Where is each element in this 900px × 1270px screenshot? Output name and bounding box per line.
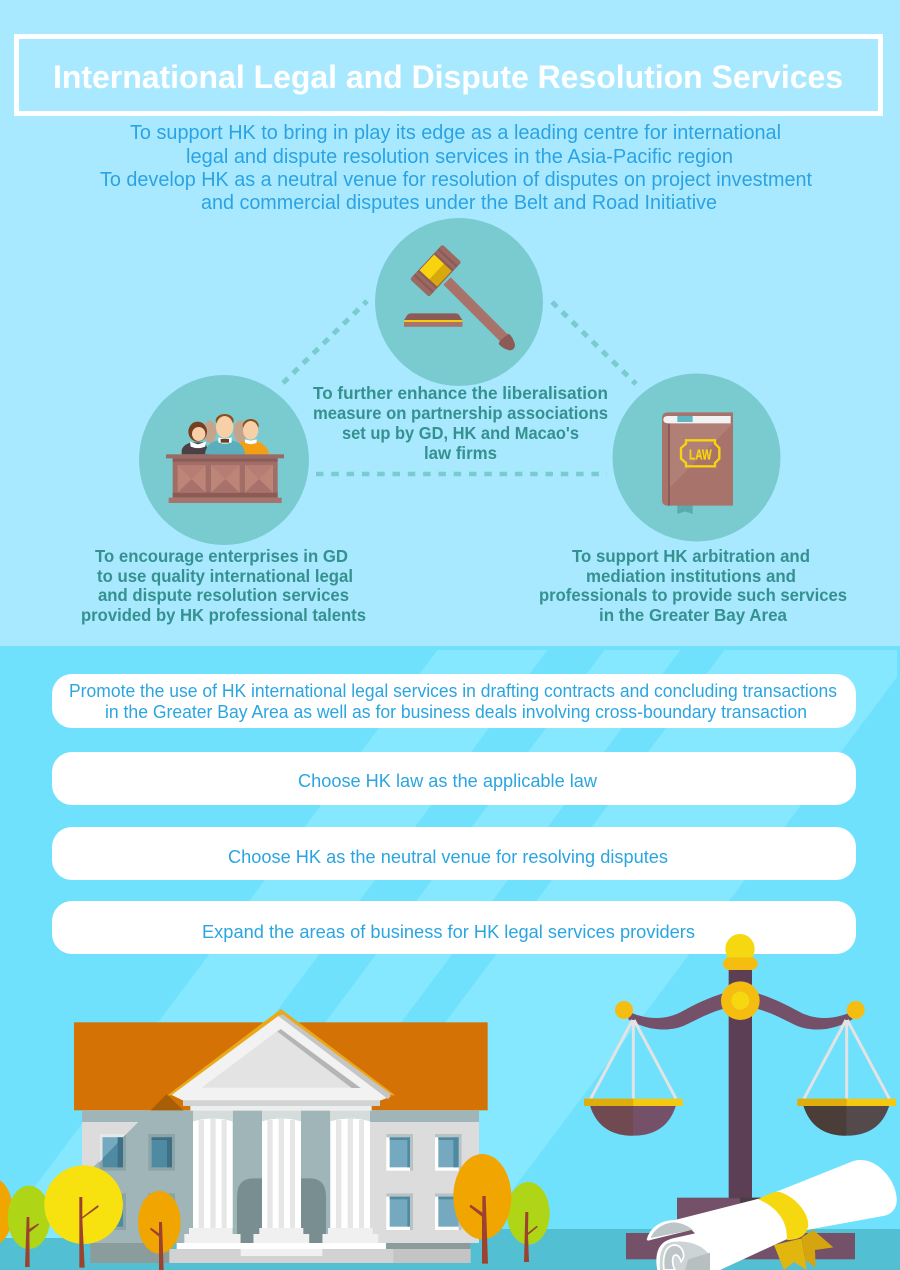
text: right measure: professionals to provide such services (539, 585, 847, 605)
base (626, 1198, 855, 1259)
trees (0, 1154, 550, 1270)
text: centre measure: law firms (424, 443, 497, 463)
icon: jury in circle (139, 375, 309, 545)
pediment (167, 1009, 395, 1111)
text: centre measure (313, 383, 608, 463)
text: centre measure: To further enhance the liberalisation (313, 383, 608, 403)
text: left measure (81, 546, 366, 625)
text: right measure (539, 546, 847, 625)
text: centre measure: set up by GD, HK and Macao's (342, 423, 579, 443)
beam (628, 993, 852, 1030)
columns (193, 1111, 370, 1228)
post (729, 967, 752, 1198)
intro text: To develop HK as a neutral venue for resolution of disputes on project investment (100, 169, 812, 191)
pill: promote HK legal services: Promote the use of HK international legal services in drafting contracts and concluding transactions (69, 681, 837, 701)
steps (90, 1228, 471, 1263)
pill: choose HK law: Choose HK law as the applicable law (298, 771, 598, 791)
text: left measure: To encourage enterprises in GD (95, 546, 348, 566)
pill: expand business: Expand the areas of business for HK legal services providers (202, 922, 695, 942)
illustration: courthouse and trees (0, 1009, 550, 1270)
background: upper section (0, 0, 900, 646)
icon: law book in circle: LAW (689, 447, 712, 463)
windows (99, 1134, 462, 1230)
text: centre measure: measure on partnership associations (313, 403, 608, 423)
dotted connectors (283, 301, 636, 474)
pill: promote HK legal services (52, 674, 856, 728)
intro text: legal and dispute resolution services in the Asia-Pacific region (186, 146, 733, 168)
title box (16, 36, 880, 114)
text: left measure: and dispute resolution services (98, 585, 349, 605)
pill: neutral venue (52, 827, 856, 880)
title: International Legal and Dispute Resolution Services (53, 59, 843, 95)
icon: gavel in circle (375, 218, 543, 386)
intro text: To support HK to bring in play its edge as a leading centre for international (130, 122, 781, 144)
illustration: scales of justice (584, 934, 896, 1259)
text: right measure: in the Greater Bay Area (599, 605, 787, 625)
building body (82, 1094, 479, 1244)
intro text: and commercial disputes under the Belt and Road Initiative (201, 192, 717, 214)
finial and pivots (615, 934, 865, 1020)
pill: promote HK legal services: in the Greater Bay Area as well as for business deals involving cross-boundary transaction (105, 702, 807, 722)
background: lower section with diagonal bands (0, 646, 900, 1270)
icon: law book in circle (612, 374, 780, 542)
intro text (100, 122, 812, 214)
text: left measure: to use quality international legal (97, 566, 353, 586)
pill: expand business (52, 901, 856, 954)
illustration: diploma scroll (647, 1160, 897, 1270)
right pan (797, 1099, 896, 1136)
left pan (584, 1099, 683, 1136)
roof (74, 1022, 488, 1110)
chains (591, 1020, 889, 1099)
text: right measure: mediation institutions and (586, 566, 796, 586)
text: right measure: To support HK arbitration and (572, 546, 810, 566)
pill: neutral venue: Choose HK as the neutral venue for resolving disputes (228, 847, 668, 867)
text: left measure: provided by HK professional talents (81, 605, 366, 625)
pill: choose HK law (52, 752, 856, 805)
